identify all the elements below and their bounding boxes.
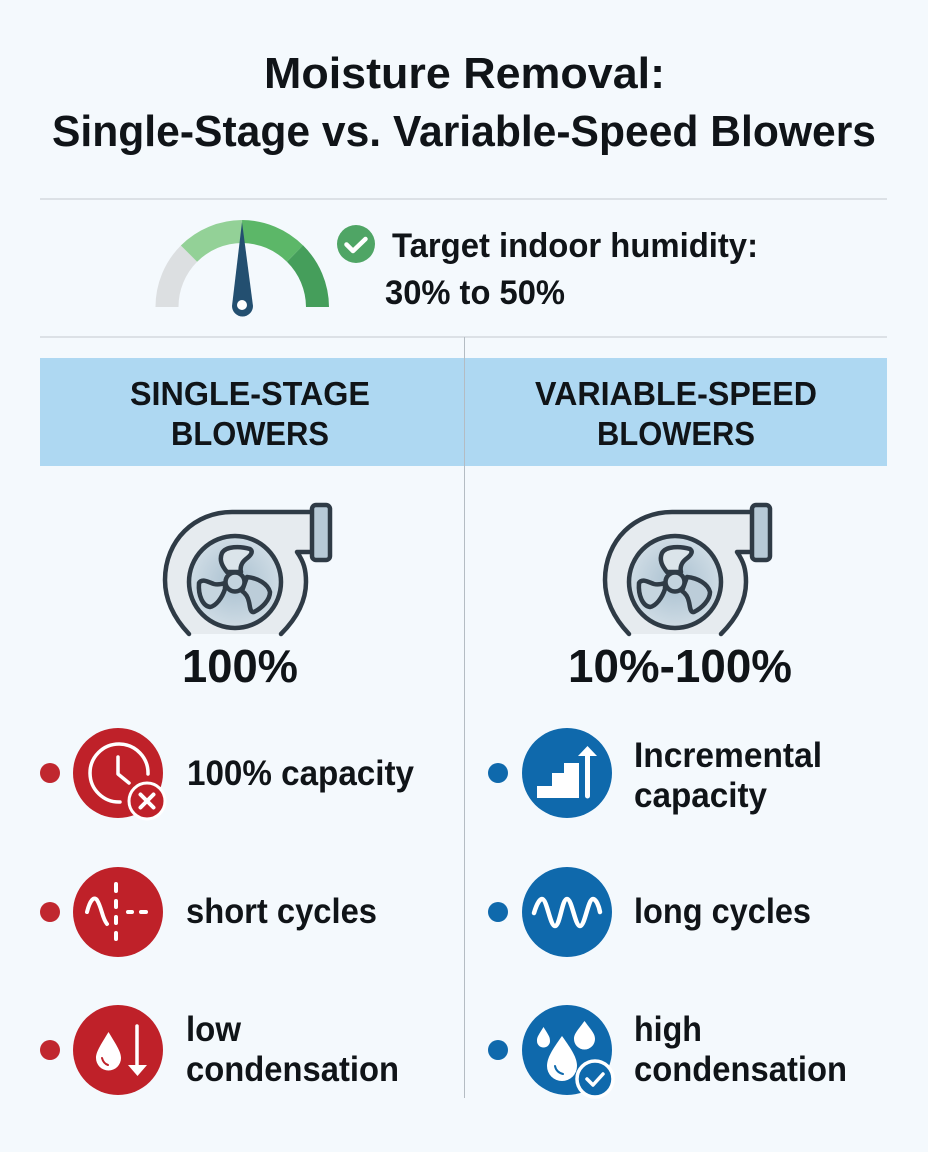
item: short cycles: [40, 867, 377, 957]
heading: variable-speed blowers: [535, 375, 817, 452]
title: [52, 49, 876, 156]
title: Moisture Removal:: [264, 49, 665, 98]
item: high condensation: [488, 1005, 847, 1097]
item: 100% capacity: [40, 728, 415, 819]
humidity gauge icon: [167, 222, 318, 316]
item: incremental capacity: capacity: [634, 776, 767, 815]
icon: single-stage blower: [165, 505, 330, 634]
item: short cycles: short cycles: [186, 892, 377, 931]
item: long cycles: [488, 867, 811, 957]
panel: single-stage column: [40, 505, 415, 1095]
icon: variable-speed blower: [605, 505, 770, 634]
item: high condensation: high: [634, 1010, 702, 1049]
humidity target text: [385, 227, 758, 312]
item: incremental capacity: [488, 728, 822, 818]
heading: variable-speed blowers: BLOWERS: [597, 415, 755, 452]
humidity target text: 30% to 50%: [385, 274, 565, 312]
icon: check mark badge: [337, 225, 375, 263]
heading: single-stage blowers: [130, 375, 370, 452]
item: high condensation: condensation: [634, 1050, 847, 1089]
heading: single-stage blowers: SINGLE-STAGE: [130, 375, 370, 412]
item: long cycles: long cycles: [634, 892, 811, 931]
item: low condensation: [40, 1005, 399, 1095]
item: low condensation: condensation: [186, 1050, 399, 1089]
item: incremental capacity: Incremental: [634, 736, 822, 775]
item: 100% capacity: 100% capacity: [187, 754, 415, 793]
humidity target text: Target indoor humidity:: [392, 227, 758, 265]
panel: variable-speed column: [488, 505, 847, 1097]
item: low condensation: low: [186, 1010, 242, 1049]
label: 100%: 100%: [182, 640, 298, 692]
heading: single-stage blowers: BLOWERS: [171, 415, 329, 452]
label: 10%-100%: 10%-100%: [568, 640, 792, 692]
heading: variable-speed blowers: VARIABLE-SPEED: [535, 375, 817, 412]
title: Single-Stage vs. Variable-Speed Blowers: [52, 107, 876, 156]
column header band: [40, 358, 887, 466]
